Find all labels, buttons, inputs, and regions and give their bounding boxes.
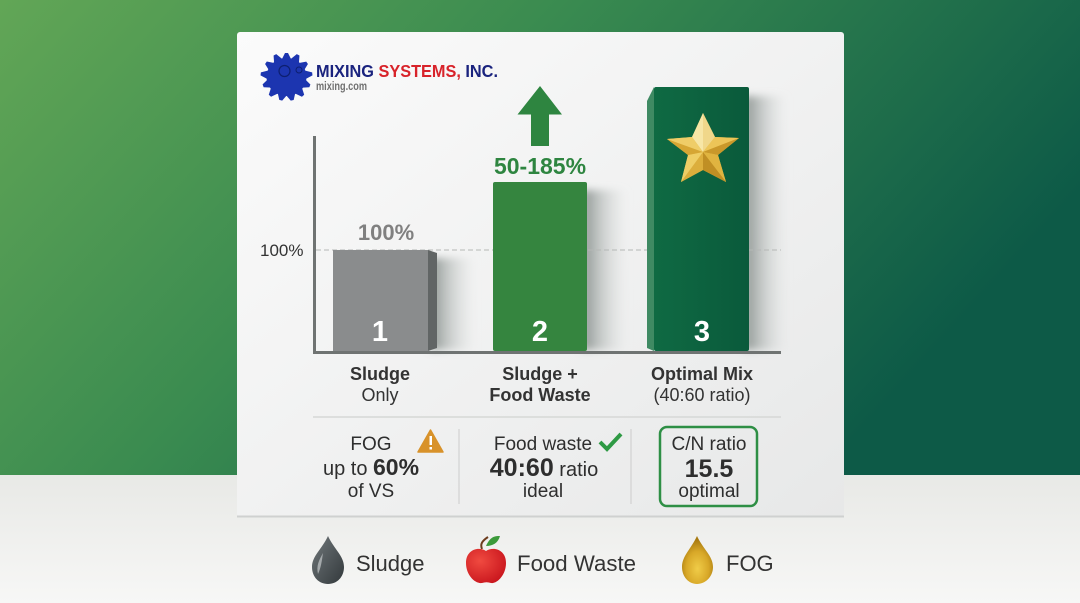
label: optimal mix: (40:60 ratio) bbox=[653, 385, 751, 405]
stat: FOG bbox=[323, 430, 443, 502]
bar 2: sludge + food waste bbox=[493, 153, 587, 351]
bar shadows bbox=[430, 96, 788, 350]
icon: gold star bbox=[667, 113, 739, 182]
legend: sludge: Sludge bbox=[356, 551, 425, 576]
stat: FOG: of VS bbox=[348, 481, 394, 502]
bar 3: optimal mix: 3 bbox=[694, 316, 710, 348]
label: sludge + food waste: Food Waste bbox=[489, 385, 591, 405]
axis label: 100% bbox=[260, 241, 303, 260]
stat: food waste: ideal bbox=[523, 481, 563, 502]
stat: FOG: up to 60% bbox=[323, 454, 419, 480]
axis bbox=[313, 136, 781, 354]
bar 2: sludge + food waste: 2 bbox=[532, 316, 548, 348]
stat: C/N ratio: optimal bbox=[678, 481, 740, 502]
bar chart bbox=[260, 86, 788, 354]
label: optimal mix: Optimal Mix bbox=[651, 364, 753, 384]
bar 3: optimal mix bbox=[647, 87, 749, 351]
legend: sludge bbox=[312, 536, 425, 584]
bar 1: sludge: 100% bbox=[358, 220, 414, 245]
company name: MIXING SYSTEMS, INC. bbox=[316, 61, 498, 81]
icon: blue gear bbox=[260, 53, 313, 101]
label: sludge only: Only bbox=[361, 385, 399, 405]
label: sludge only bbox=[350, 364, 410, 405]
legend: FOG: FOG bbox=[726, 551, 774, 576]
label: sludge + food waste bbox=[489, 364, 591, 405]
bar 1: sludge: 1 bbox=[372, 316, 388, 348]
stat: FOG: FOG bbox=[350, 434, 392, 455]
icon: warning bbox=[418, 430, 443, 452]
stat: food waste: 40:60 ratio bbox=[490, 454, 598, 482]
legend bbox=[312, 536, 774, 584]
icon: check bbox=[600, 434, 621, 449]
legend: FOG bbox=[682, 536, 774, 584]
label: sludge + food waste: Sludge + bbox=[502, 364, 578, 384]
label: optimal mix bbox=[651, 364, 753, 405]
100% gridline bbox=[316, 249, 781, 251]
legend: food waste apple bbox=[466, 536, 636, 583]
panel: chart card bbox=[237, 32, 844, 518]
label: sludge only: Sludge bbox=[350, 364, 410, 384]
category labels bbox=[350, 364, 753, 405]
stat: food waste bbox=[490, 434, 621, 502]
stat: C/N ratio: C/N ratio bbox=[672, 434, 746, 455]
bar 1: sludge bbox=[333, 220, 437, 351]
stat: food waste: Food waste bbox=[494, 434, 592, 455]
website: mixing.com bbox=[316, 81, 367, 93]
arrow up bbox=[518, 86, 562, 146]
legend: food waste apple: Food Waste bbox=[517, 551, 636, 576]
stat: C/N ratio: 15.5 bbox=[685, 455, 733, 483]
bar 2: sludge + food waste: 50-185% bbox=[494, 153, 586, 179]
stat: C/N ratio bbox=[660, 427, 757, 506]
logo bbox=[260, 53, 498, 101]
